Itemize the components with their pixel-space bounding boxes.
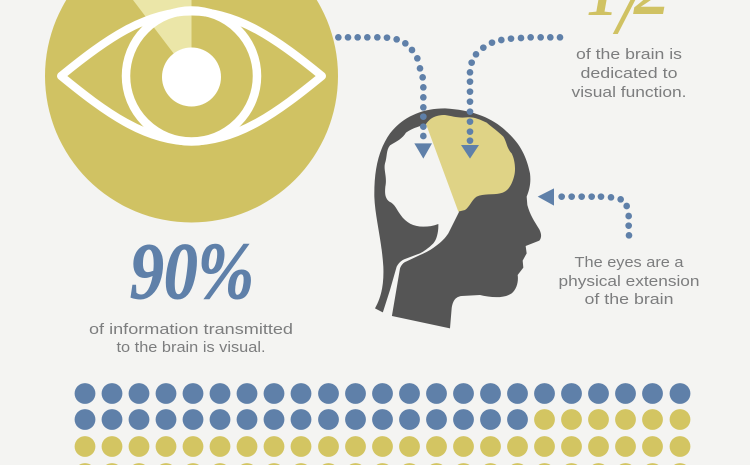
arrow: one half to brain xyxy=(461,34,563,159)
icon: eye in gold circle xyxy=(45,0,338,222)
text: eyes are extension of the brain: physical extension xyxy=(558,273,700,290)
text: brain dedicated to vision: dedicated to xyxy=(580,65,678,82)
arrow: eye to brain xyxy=(335,34,432,159)
heading: 1/2 xyxy=(587,0,670,53)
text: information transmitted: to the brain is visual. xyxy=(116,339,266,356)
icon: head with brain xyxy=(374,108,541,328)
text: information transmitted: of information transmitted xyxy=(89,321,293,338)
text: brain dedicated to vision xyxy=(572,46,686,101)
text: brain dedicated to vision: of the brain is xyxy=(576,46,682,63)
text: eyes are extension of the brain xyxy=(558,254,700,308)
chart: dot pictogram xyxy=(75,383,690,465)
heading: 90%: 90% xyxy=(130,228,254,316)
text: information transmitted xyxy=(89,321,293,356)
text: brain dedicated to vision: visual function. xyxy=(572,84,686,101)
text: eyes are extension of the brain: of the brain xyxy=(584,291,674,308)
text: eyes are extension of the brain: The eyes are a xyxy=(574,254,684,271)
arrow: eyes extension to head xyxy=(538,188,632,239)
